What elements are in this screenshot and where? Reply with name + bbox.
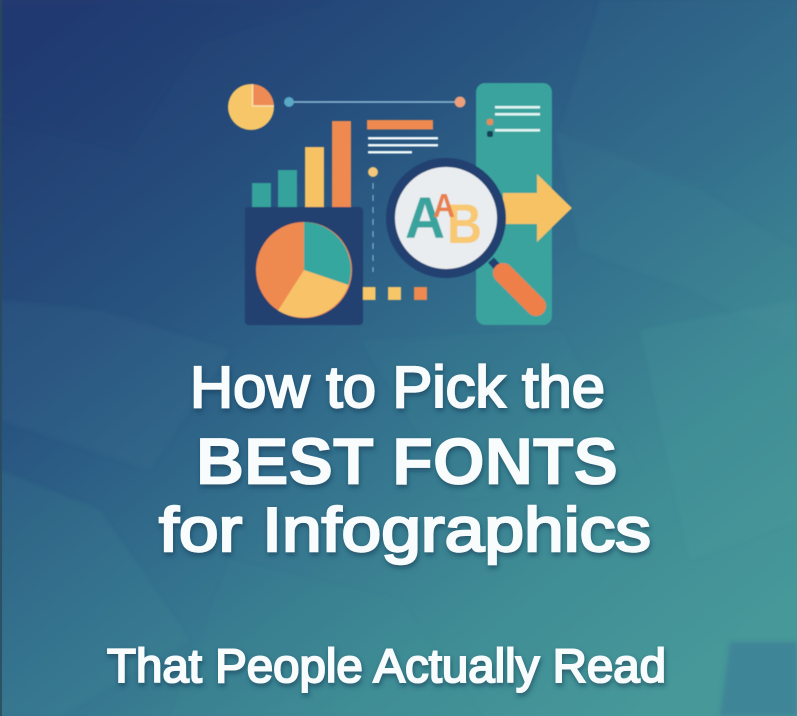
icon: small pie chart	[228, 84, 274, 130]
letters A A B: A	[405, 186, 445, 251]
panel: dark pie chart card	[245, 207, 363, 325]
text block: orange heading and white lines	[367, 120, 438, 154]
letters A A B: A	[433, 187, 455, 224]
letters A A B	[405, 186, 482, 255]
arrow	[503, 174, 572, 242]
icon: magnifying glass with letters	[390, 162, 536, 306]
panel: teal sidebar	[476, 83, 552, 325]
subtitle: That People Actually Read	[107, 639, 666, 692]
bar chart	[252, 121, 351, 208]
title: How to Pick the	[190, 355, 605, 420]
title: for Infographics	[159, 496, 651, 565]
legend squares	[363, 287, 427, 300]
illustration: data graphics and magnifying glass	[228, 83, 572, 325]
connector line with dots	[284, 96, 466, 108]
title: BEST FONTS	[196, 424, 618, 498]
letters A A B: B	[447, 192, 482, 255]
title	[159, 355, 651, 565]
dashed connector with dot	[368, 167, 378, 272]
